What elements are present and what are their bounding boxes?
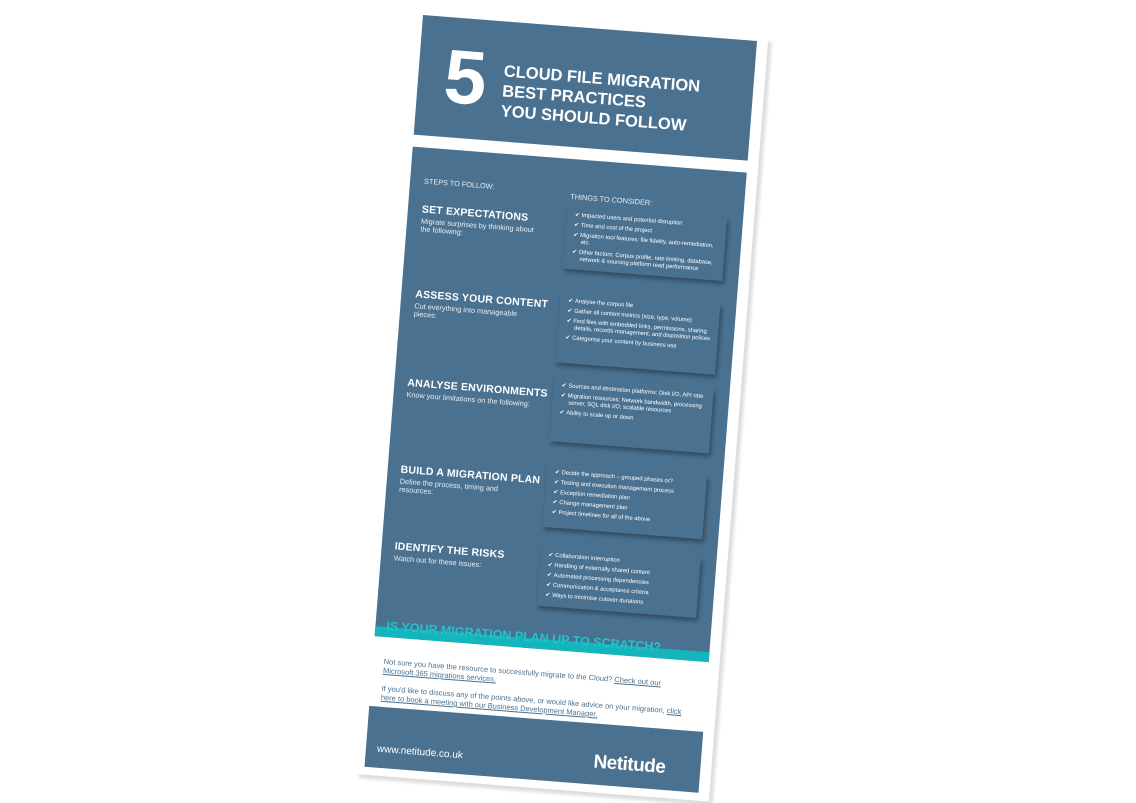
step 3: ANALYSE ENVIRONMENTS <box>407 377 548 400</box>
step 4 <box>399 464 541 496</box>
step 5: IDENTIFY THE RISKS <box>394 540 505 561</box>
big number 5: 5 <box>441 34 490 122</box>
step 4: BUILD A MIGRATION PLAN <box>400 464 541 486</box>
step 1 <box>420 204 534 237</box>
box 4: Project timelines for all of the above <box>558 510 650 523</box>
box 2: Gather all content metrics (size, type, volume) <box>574 309 692 324</box>
paragraph 2: If you'd like to discuss any of the points above, or would like advice on your migration, click here to book a meeting with our Business Development Manager. <box>381 684 682 719</box>
box 1: Time and cost of the project <box>581 223 652 234</box>
box 4: Decide the approach – grouped phases or? <box>561 470 673 485</box>
box 5 <box>537 546 701 618</box>
step 2: Cut everything into manageable pieces: <box>413 301 518 320</box>
box 1 <box>563 206 727 281</box>
box 2 <box>555 292 720 375</box>
box 4 <box>543 463 707 539</box>
teal heading: IS YOUR MIGRATION PLAN UP TO SCRATCH? <box>386 619 661 654</box>
step 4: Define the process, timing and resources: <box>399 477 498 496</box>
step 3: Know your limitations on the following: <box>406 390 530 408</box>
box 5: Ways to minimise cutover durations <box>552 593 643 606</box>
box 4: Exception remediation plan <box>560 490 630 501</box>
box 4: Change management plan <box>559 500 628 511</box>
step 5: Watch out for these issues: <box>393 553 482 569</box>
footer panel <box>364 706 703 793</box>
box 5: Handling of externally shared content <box>554 563 650 576</box>
steps label: STEPS TO FOLLOW: <box>424 177 495 191</box>
header panel <box>414 15 757 161</box>
box 3: Migration resources: Network bandwidth, processing server, SQL disk I/O, scalable resources <box>567 393 702 414</box>
teal band <box>375 626 709 662</box>
title: CLOUD FILE MIGRATION <box>503 62 701 96</box>
paragraph 1: Not sure you have the resource to successfully migrate to the Cloud? Check out our Microsoft 365 migrations services. <box>383 657 661 687</box>
title: BEST PRACTICES <box>502 82 647 112</box>
box 5: Communication & acceptance criteria <box>553 583 649 596</box>
box 2: Find files with embedded links, permissions, sharing details, records management, and disposition polices <box>573 319 710 342</box>
title: YOU SHOULD FOLLOW <box>500 102 687 135</box>
box 5: Collaboration interruption <box>555 553 620 564</box>
step 1: Migrate surprises by thinking about the following: <box>420 216 534 237</box>
box 5: Automated processing dependencies <box>553 573 649 586</box>
box 1: Impacted users and potential disruption <box>581 213 683 227</box>
box 1: Other factors: Corpus profile, rate limiting, database, network & sourcing platform read performance <box>578 250 713 272</box>
box 3: Sources and destination platforms: Disk I/O, API rate <box>568 383 703 400</box>
step 2 <box>413 288 549 320</box>
logo: Netitude <box>593 752 666 778</box>
box 1: Migration tool features: file fidelity, auto-remediation, etc. <box>580 233 714 249</box>
step 1: SET EXPECTATIONS <box>421 204 529 224</box>
url: www.netitude.co.uk <box>376 744 463 761</box>
things label: THINGS TO CONSIDER: <box>570 192 653 207</box>
title <box>500 62 701 135</box>
box 3 <box>549 376 714 453</box>
main panel <box>375 147 747 662</box>
box 2: Analyse the corpus file <box>575 299 633 309</box>
box 2: Categorise your content by business use <box>572 336 677 350</box>
box 3: Ability to scale up or down <box>566 410 634 422</box>
box 4: Testing and execution management process <box>561 480 674 495</box>
step 2: ASSESS YOUR CONTENT <box>415 288 549 311</box>
